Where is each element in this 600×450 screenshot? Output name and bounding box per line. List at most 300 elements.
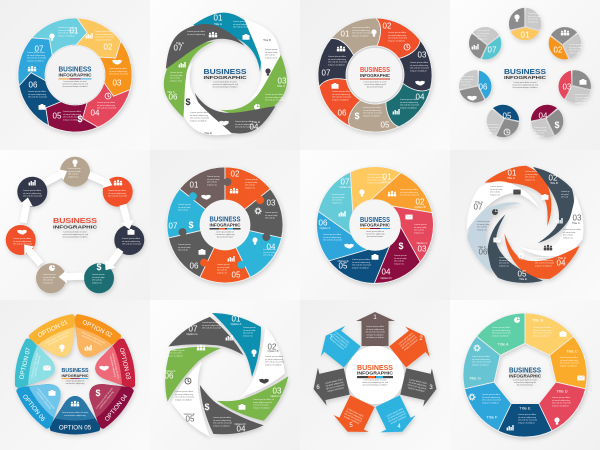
panel 8: deep swirl — [456, 150, 600, 299]
blade 06: elit sed do — [170, 77, 181, 80]
panel 9: rounded option petals — [11, 310, 139, 434]
segment 06: tempor incididunt — [332, 98, 349, 101]
petal 05 — [50, 396, 100, 434]
centre heading — [504, 69, 547, 89]
blade 06: elit sed do — [477, 226, 488, 229]
centre heading: Lorem ipsum dolor sit amet — [214, 80, 237, 84]
segment 01: tempor incididunt — [352, 34, 369, 37]
circle 4 — [84, 262, 114, 293]
segment 05: tempor incididunt — [363, 114, 380, 117]
blade 06: tempor incididunt — [166, 354, 183, 357]
blade 07: sit amet adipiscing — [202, 324, 221, 327]
blade 06 — [301, 211, 374, 274]
centre heading — [62, 368, 89, 385]
blade 01: Title A — [507, 176, 515, 180]
blade 03: 03 — [273, 386, 282, 396]
centre disc and heading: BUSINESS — [360, 67, 390, 74]
piece 06 — [159, 219, 218, 277]
blade 01: Option A — [231, 322, 241, 326]
blade 04: 04 — [382, 268, 391, 276]
blade 07 — [156, 8, 245, 98]
segment 06: sit amet adipiscing — [332, 93, 351, 96]
piece 01: sit amet adip — [207, 178, 220, 181]
blade 05: tempor inc — [499, 264, 510, 267]
segment 02: Lorem ipsum dolor — [95, 30, 113, 33]
circle 4: Lorem ipsum — [92, 273, 105, 276]
segment 02: sit amet adipiscing — [388, 34, 407, 37]
centre disc and heading: BUSINESS — [360, 217, 390, 224]
blade 02: sit amet adip — [265, 51, 278, 54]
segment 01: sit amet adipiscing — [352, 29, 371, 32]
petal 06: OPTION 06 — [21, 393, 47, 423]
blade 03: Option C — [270, 394, 282, 398]
blade 01: elit sed do eiusmod — [233, 26, 253, 29]
pie 06 — [456, 67, 495, 106]
centre disc and heading — [350, 200, 400, 250]
piece 01 — [180, 153, 241, 215]
pie 03: 03 — [563, 82, 572, 92]
blade 01: 01 — [508, 168, 517, 178]
arrow 1: ut labore et dolore — [366, 336, 385, 339]
circle 4: elit sed do — [92, 279, 103, 282]
blade 04: $ — [398, 241, 404, 251]
pie 05: 05 — [503, 112, 512, 120]
piece 05 — [191, 239, 250, 297]
circle 4: tempor inc — [92, 281, 103, 284]
blade 03: tempor incididunt — [253, 406, 270, 409]
blade 05: Lorem ipsum — [499, 256, 512, 259]
blade 03 — [220, 44, 293, 124]
segment Title C — [540, 336, 600, 401]
arrow 7: elit sed do eiusmod — [331, 335, 348, 350]
blade 01: Lorem ipsum — [525, 170, 538, 173]
circle 7 — [17, 177, 47, 207]
blade 05: elit sed do eiusmod — [352, 264, 372, 267]
circle 4: sit amet adip — [92, 276, 105, 279]
blade 06: Option F — [165, 369, 176, 373]
panel 6: puzzle ring — [158, 153, 299, 297]
segment Title C: Title C — [566, 348, 578, 354]
blade 01: Option A — [382, 180, 392, 184]
blade 07: tempor inc — [332, 201, 343, 204]
segment 07: sit amet adipiscing — [328, 58, 347, 61]
segment 02 — [376, 18, 420, 58]
segment Title A: sit amet adipiscing — [492, 329, 511, 332]
blade 03: elit sed do — [414, 229, 425, 232]
circle 3: sit amet adipiscing — [122, 240, 141, 243]
pie 01: tempor inc — [528, 20, 539, 23]
pie 01: 01 — [521, 30, 530, 40]
blade 04: elit sed do eiusmod — [235, 126, 255, 129]
blade 07 — [168, 308, 249, 386]
blade 03: elit sed do — [563, 234, 574, 237]
centre heading: BUSINESS — [357, 365, 393, 372]
petal 01: Lorem ipsum dolor sit amet — [44, 330, 70, 345]
blade 04: Lorem ipsum dolor — [235, 120, 253, 123]
arrow 4: elit sed do eiusmod — [388, 412, 407, 423]
arrow 7: tempor incididunt — [330, 338, 345, 351]
panel 5: circles linked by arrows — [6, 157, 144, 293]
blade 03: tempor inc — [414, 231, 425, 234]
blade 05: Lorem ipsum dolor — [175, 390, 193, 393]
piece 05: tempor inc — [217, 271, 228, 274]
blade 05 — [473, 212, 543, 299]
blade 07 — [458, 173, 541, 230]
blade 03: sit amet adip — [414, 226, 427, 229]
centre heading: INFOGRAPHIC — [53, 225, 98, 230]
circle 2 — [103, 177, 133, 207]
pie 07: sit amet adip — [477, 32, 490, 35]
blade 01: Lorem ipsum dolor — [233, 20, 251, 23]
blade 02: Option B — [268, 349, 279, 353]
arrow 1 — [356, 312, 395, 346]
circle 2: sit amet adipiscing — [108, 192, 127, 195]
blade 06: Title F — [478, 245, 486, 249]
blade 05 — [329, 234, 402, 297]
blade 02: sit amet — [561, 193, 569, 196]
panel 10: shutter swirl — [157, 308, 296, 446]
petal 03: consectetur adipiscing — [109, 355, 117, 378]
blade 05: Title E — [519, 277, 527, 281]
segment Title G: Lorem ipsum dolor — [472, 355, 490, 358]
segment Title G: tempor incididunt — [472, 363, 489, 366]
blade 06 — [157, 339, 230, 401]
segment 03: 03 — [113, 78, 122, 88]
piece 01: 01 — [190, 180, 199, 190]
centre disc and heading: consectetur adipiscing — [216, 233, 234, 236]
blade 02: elit sed — [561, 196, 569, 199]
blade 03: 03 — [573, 214, 582, 222]
circle 5: sit amet adip — [43, 276, 56, 279]
petal 02: OPTION 02 — [81, 319, 114, 339]
blade 03: Title C — [572, 221, 580, 225]
pie 06: tempor inc — [461, 83, 472, 86]
segment 03: sit amet adipiscing — [410, 64, 429, 67]
petal 02 — [61, 310, 123, 367]
segment 04 — [381, 80, 430, 132]
centre disc and heading — [348, 48, 402, 102]
arrow 3: 3 — [429, 385, 433, 391]
segment 05 — [39, 87, 106, 145]
blade 06: Lorem ipsum dolor — [323, 233, 341, 236]
centre heading — [357, 365, 394, 386]
blade 04: Title D — [558, 256, 566, 260]
blade 04 — [194, 64, 281, 147]
blade 03: 03 — [278, 76, 287, 86]
segment 06: 06 — [338, 108, 347, 118]
centre heading: consectetur adipiscing elit, sed — [362, 381, 388, 384]
pie 02: Lorem ipsum — [569, 43, 582, 46]
centre disc and heading: consectetur adipiscing elit — [364, 83, 386, 86]
piece 03: sit amet adip — [265, 214, 278, 217]
pie 03: Lorem ipsum — [575, 93, 588, 96]
segment Title F — [454, 372, 516, 431]
blade 06: Lorem ipsum dolor sit — [166, 346, 187, 349]
pie 05: Lorem ipsum — [486, 123, 499, 126]
segment 03 — [389, 40, 448, 100]
piece 07: $ — [188, 220, 194, 230]
segment Title D: Title D — [556, 388, 568, 394]
blade 05 — [165, 62, 253, 145]
blade 05: Lorem ipsum dolor — [190, 111, 208, 114]
petal 07: OPTION 07 — [18, 347, 32, 380]
blade 01: elit sed do — [525, 176, 536, 179]
blade 07: Title G — [475, 200, 483, 204]
centre heading: INFOGRAPHIC — [509, 373, 542, 378]
blade 07: Lorem ipsum dolor — [187, 30, 205, 33]
blade 01: 01 — [232, 314, 241, 324]
blade 01: 01 — [214, 14, 223, 22]
segment 03 — [91, 37, 140, 99]
blade 06: amet adipiscing elit — [166, 349, 185, 352]
petal 01: consectetur adipiscing — [48, 334, 69, 346]
piece 07: elit sed do — [178, 209, 189, 212]
pie 06: sit amet adip — [461, 78, 474, 81]
blade 01: sit amet adip — [525, 173, 538, 176]
centre disc and heading: INFOGRAPHIC — [360, 222, 391, 228]
piece 04: Lorem ipsum — [263, 248, 276, 251]
petal 03: OPTION 03 — [118, 347, 132, 381]
circle 3: Lorem ipsum dolor — [122, 237, 140, 240]
piece 01: elit sed do — [207, 181, 218, 184]
segment Title B: elit sed do eiusmod — [533, 332, 553, 335]
piece 06: Lorem ipsum — [178, 243, 191, 246]
blade 04 — [374, 224, 427, 292]
centre backing — [346, 346, 404, 404]
blade 07: sit amet adip — [490, 188, 503, 191]
blade 05: sit amet adipiscing — [352, 261, 371, 264]
centre heading — [53, 218, 98, 238]
segment 03: elit sed do eiusmod — [109, 73, 129, 76]
centre heading: do eiusmod tempor incididunt — [213, 86, 238, 88]
arrow 6: sit amet adipiscing — [325, 381, 344, 388]
circle 1: elit sed do — [68, 173, 79, 176]
pie 03: elit sed do — [575, 99, 586, 102]
pie 01: elit sed do — [528, 18, 539, 21]
petal 04: $ — [95, 388, 101, 398]
circle 7: sit amet adipiscing — [23, 192, 42, 195]
blade 01: sit amet adip — [243, 329, 256, 332]
segment Title G: Title G — [469, 376, 481, 380]
blade 07: 07 — [474, 202, 483, 212]
blade 01: tempor inc — [525, 178, 536, 181]
pie 02: tempor inc — [569, 51, 580, 54]
circle 5: elit sed do — [43, 279, 54, 282]
pie 02: 02 — [554, 46, 563, 54]
segment 05 — [341, 90, 399, 146]
blade 01: Lorem ipsum dolor — [367, 173, 385, 176]
segment 07 — [309, 35, 359, 87]
centre heading: INFOGRAPHIC — [357, 370, 394, 376]
arrow 4: tempor incididunt — [390, 415, 407, 425]
arrow 5: sit amet adipiscing — [345, 410, 363, 421]
segment Title C: elit sed do eiusmod — [560, 362, 580, 365]
segment Title F: tempor incididunt — [482, 401, 499, 404]
blade 04: elit sed do eiusmod — [535, 262, 555, 265]
centre heading: consectetur adipiscing elit, sed — [512, 84, 538, 86]
arrow 6: 6 — [316, 385, 320, 391]
blade 04: $ — [204, 402, 210, 412]
pie 05: tempor inc — [486, 131, 497, 134]
blade 05: sit amet adipiscing — [190, 114, 209, 117]
circle 1: Lorem ipsum — [68, 167, 81, 170]
centre disc and heading: INFOGRAPHIC — [58, 73, 92, 78]
blade 04: Lorem ipsum dolor — [535, 256, 553, 259]
segment 01: 01 — [70, 26, 79, 36]
blade 07: 07 — [341, 178, 350, 186]
segment Title F: sit amet adipiscing — [482, 396, 501, 399]
blade 04: Title D — [252, 120, 260, 124]
pie 07 — [462, 21, 508, 66]
segment 03: Lorem ipsum dolor — [410, 61, 428, 64]
arrow 7: sit amet adipiscing — [333, 333, 349, 347]
arrow 3: tempor incididunt — [408, 386, 425, 393]
segment 01: 01 — [341, 30, 350, 38]
segment Title D: elit sed do eiusmod — [552, 402, 572, 405]
segment 05: tempor incididunt — [63, 118, 80, 121]
segment 03: 03 — [418, 50, 427, 60]
blade 06: Title F — [167, 90, 175, 94]
piece 07: sit amet adip — [178, 206, 191, 209]
blade 02: 02 — [549, 174, 558, 182]
centre heading: BUSINESS — [504, 69, 546, 76]
arrow 4: Lorem ipsum dolor — [386, 407, 404, 418]
segment 04: tempor incididunt — [400, 106, 417, 109]
segment 07: sit amet adipiscing — [27, 54, 46, 57]
blade 05: Option E — [338, 259, 349, 263]
centre disc and heading — [46, 46, 104, 104]
panel 12: heptagon ring with titles — [454, 298, 600, 450]
segment 07: 07 — [322, 68, 331, 78]
segment 04: 04 — [416, 92, 425, 102]
segment 05: elit sed do eiusmod — [363, 112, 383, 115]
segment Title A — [477, 298, 540, 363]
blade 05: Title E — [204, 131, 212, 135]
segment 01: Lorem ipsum dolor — [58, 26, 76, 29]
arrow 3: elit sed do eiusmod — [407, 383, 427, 391]
piece 03: Lorem ipsum — [265, 211, 278, 214]
blade 04: elit sed do eiusmod — [213, 422, 233, 425]
segment 02 — [63, 6, 127, 72]
segment Title E: sit amet adipiscing — [518, 416, 537, 419]
segment Title F: Title F — [487, 414, 498, 420]
blade 05: elit sed do — [499, 262, 510, 265]
puzzle knobs — [178, 178, 271, 270]
blade 07: Lorem ipsum — [332, 193, 345, 196]
segment 01 — [331, 4, 390, 64]
blade 02: Lorem ipsum dolor — [400, 188, 418, 191]
pie 04: $ — [554, 120, 560, 130]
piece 02: sit amet adip — [245, 181, 258, 184]
segment 05: Lorem ipsum dolor — [363, 106, 381, 109]
arrow 2: Lorem ipsum dolor — [398, 332, 414, 345]
segment 07: tempor incididunt — [328, 63, 345, 66]
arrow 6 — [309, 362, 351, 408]
arrow 3: Lorem ipsum dolor — [409, 378, 428, 385]
blade 01: elit sed do — [243, 332, 254, 335]
blade 04: Option D — [234, 422, 246, 426]
centre heading: BUSINESS — [62, 368, 89, 374]
segment Title E: Title E — [519, 406, 531, 410]
arrow 4: sit amet adipiscing — [387, 409, 405, 420]
blade 03: Lorem ipsum dolor — [265, 93, 283, 96]
blade 06: tempor inc — [477, 228, 488, 231]
blade 02: Title B — [263, 38, 271, 42]
blade 02: tempor incid — [265, 56, 278, 59]
blade 05: 05 — [518, 270, 527, 278]
arrow 3: sit amet adipiscing — [408, 381, 427, 388]
blade 01: Title A — [214, 22, 222, 26]
petal 02: Lorem ipsum dolor sit amet — [80, 331, 106, 345]
piece 02: tempor inc — [245, 186, 256, 189]
blade 01: sit amet adipiscing — [233, 23, 252, 26]
pie 06: 06 — [479, 82, 488, 92]
connecting arrows — [15, 163, 140, 289]
blade 02 — [207, 11, 296, 101]
petal 04: OPTION 04 — [104, 393, 130, 423]
blade 07: elit sed do — [332, 199, 343, 202]
blade 03 — [215, 362, 288, 424]
arrow 1: tempor incididunt — [367, 333, 384, 336]
centre disc and heading: consectetur adipiscing — [366, 232, 384, 236]
segment 03: sit amet adipiscing — [109, 70, 128, 73]
blade 02: sit amet adipiscing — [400, 191, 419, 194]
segment 05: 05 — [381, 120, 390, 130]
segment 01: tempor incididunt — [58, 34, 75, 37]
blade 03: 03 — [418, 244, 427, 254]
blade 01 — [212, 313, 261, 377]
segment 02: tempor incididunt — [95, 38, 112, 41]
segment 04: elit sed do eiusmod — [97, 107, 117, 110]
segment 02: elit sed do eiusmod — [95, 36, 115, 39]
segment Title D: Lorem ipsum dolor — [552, 396, 570, 399]
pie 07: Lorem ipsum — [477, 29, 490, 32]
blade 04: sit amet adipiscing — [535, 259, 554, 262]
blade 02: Option B — [415, 205, 426, 209]
centre heading — [204, 69, 247, 88]
segment Title E: Lorem ipsum dolor — [518, 413, 536, 416]
centre disc and heading: Lorem ipsum dolor sit — [366, 230, 385, 233]
blade 02 — [533, 167, 574, 243]
segment 03: Lorem ipsum dolor — [109, 67, 127, 70]
centre heading: BUSINESS — [204, 69, 247, 76]
piece 07: Lorem ipsum — [178, 203, 191, 206]
centre heading: Lorem ipsum dolor sit amet — [514, 81, 537, 84]
petal 04: Lorem ipsum dolor sit amet — [95, 387, 114, 410]
segment 06: sit amet adipiscing — [28, 93, 47, 96]
arrow 5: Lorem ipsum dolor — [346, 407, 364, 418]
pie 04: 04 — [539, 112, 548, 120]
piece 05: sit amet adip — [217, 266, 230, 269]
centre disc and heading: consectetur adipiscing elit, sed — [62, 82, 88, 86]
blade 03: tempor inc — [563, 236, 574, 239]
arrow 7 — [314, 320, 365, 372]
blade 07: Lorem ipsum — [490, 185, 503, 188]
segment 05: sit amet adipiscing — [363, 109, 382, 112]
pie 01 — [509, 8, 541, 40]
blade 02: elit sed do eiusmod — [400, 194, 420, 197]
segment Title A: tempor incididunt — [492, 334, 509, 337]
circle 3 — [114, 225, 144, 255]
blade 06: 06 — [479, 248, 488, 256]
blade 06: Lorem ipsum — [170, 71, 183, 74]
arrow 5 — [330, 392, 380, 440]
piece 04: elit sed do — [263, 254, 274, 257]
centre disc and heading: INFOGRAPHIC — [360, 73, 391, 78]
piece 07: 07 — [169, 222, 178, 230]
centre disc and heading: Lorem ipsum dolor sit — [216, 230, 235, 234]
pie 03: sit amet adip — [575, 96, 588, 99]
